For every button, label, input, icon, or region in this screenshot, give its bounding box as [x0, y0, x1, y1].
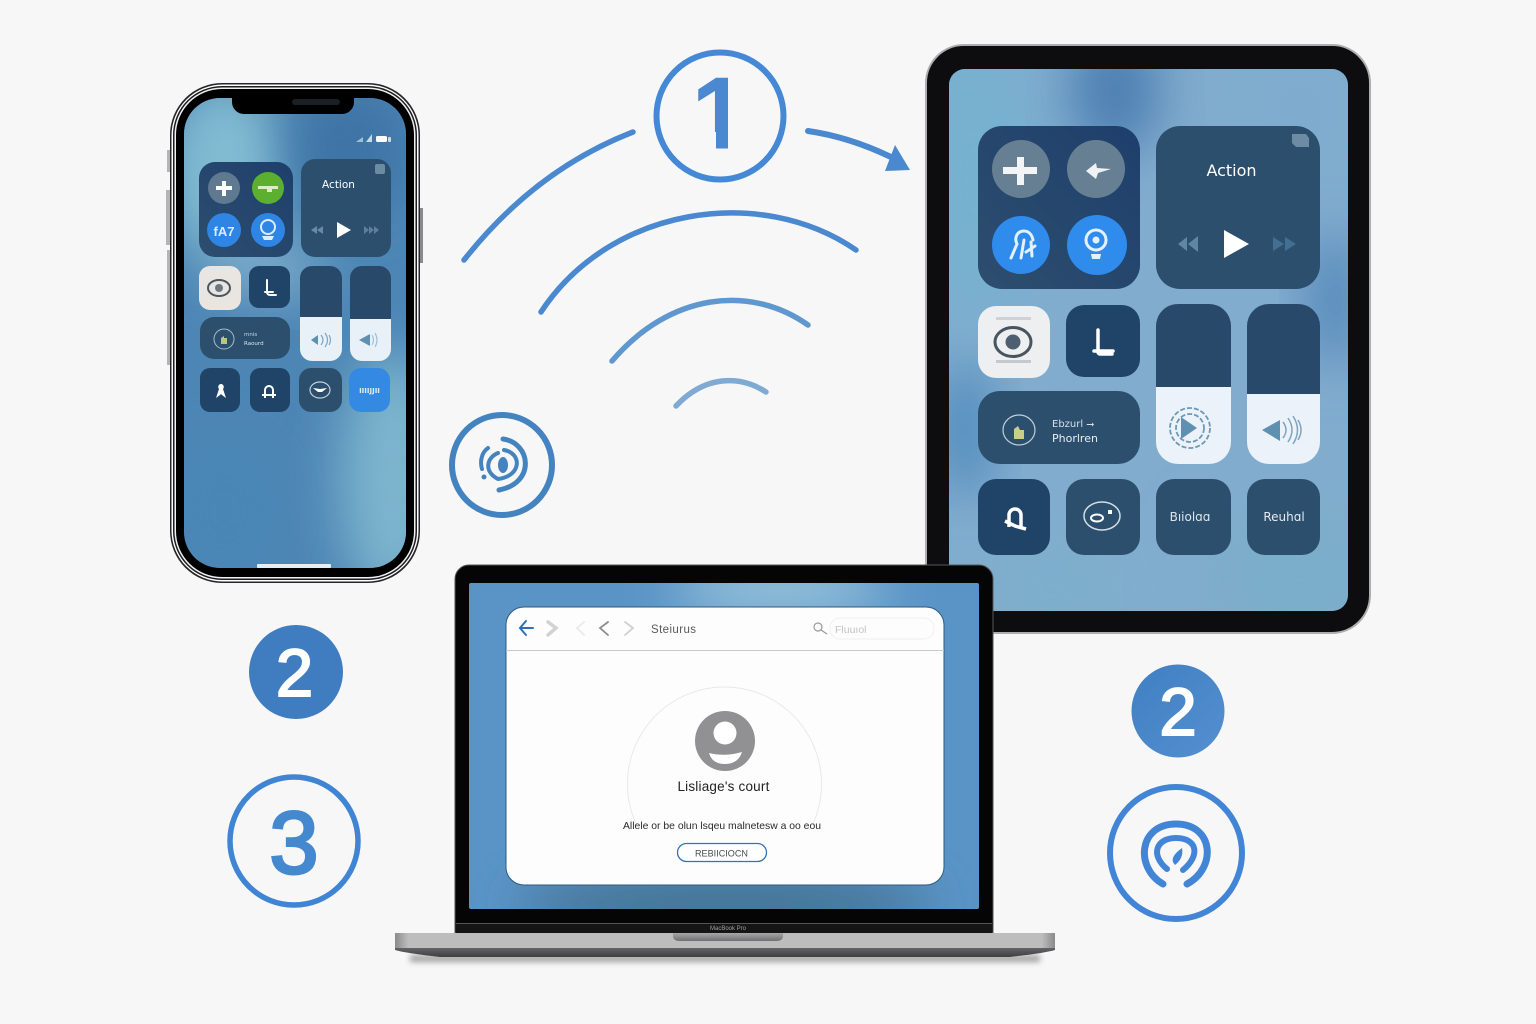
phone media panel: [301, 159, 391, 257]
tablet L tile: [1066, 305, 1140, 377]
browser title: Steiurus: [651, 624, 696, 636]
phone connectivity block: [199, 162, 293, 257]
phone screen: [184, 98, 406, 568]
arrow to tablet: [808, 131, 910, 171]
phone L tile: [249, 266, 290, 308]
profile button: REBIICIOCN: [695, 848, 748, 858]
step 3 badge: [230, 777, 358, 905]
laptop hinge: [456, 923, 992, 933]
phone wide tile: [200, 317, 290, 359]
profile icon: [695, 711, 755, 771]
tablet wide tile: Ebzurl ⭢: [1052, 419, 1094, 430]
phone bottom tiles: IIIIJJII: [359, 387, 380, 395]
tablet bottom tiles: [978, 479, 1320, 555]
profile name: Lisliage's court: [677, 779, 770, 794]
phone wide tile: mnis: [244, 332, 257, 338]
phone notch: [232, 97, 354, 114]
laptop screen: [469, 583, 979, 909]
arc 3: [612, 300, 808, 361]
step 3 badge: 3: [270, 793, 318, 892]
laptop: [395, 565, 1055, 962]
tablet media panel: [1156, 126, 1320, 289]
tablet slider 1: [1156, 304, 1231, 464]
laptop hinge: MacBook Pro: [710, 926, 747, 932]
phone home bar: [257, 564, 331, 568]
browser divider: [506, 650, 944, 651]
laptop lid: [455, 565, 993, 933]
arc 1: [464, 132, 633, 260]
step 2 badge left: [249, 625, 343, 719]
phone bottom tiles: [200, 368, 390, 412]
phone side buttons: [166, 150, 423, 365]
browser search: [814, 618, 934, 639]
tablet bottom tiles: Reuhɑl: [1263, 510, 1305, 524]
step 2 badge right: 2: [1159, 675, 1197, 750]
tablet: [915, 25, 1390, 640]
phone media panel: Action: [322, 179, 355, 191]
step 1 badge: 1: [692, 58, 748, 170]
connection arcs: [464, 132, 856, 406]
phone slider 1: [300, 266, 342, 361]
laptop base: [395, 933, 1055, 957]
tablet wide tile: [978, 391, 1140, 464]
tablet bottom tiles: Bıiolɑɑ: [1170, 510, 1210, 524]
tablet body: [926, 45, 1370, 633]
step 2 badge left: 2: [276, 636, 313, 711]
tablet slider 2: [1247, 304, 1320, 464]
tablet wide tile: Phorlren: [1052, 432, 1098, 445]
phone eye tile: [199, 266, 241, 310]
icon: left signal: [452, 415, 552, 515]
arc 2: [541, 213, 856, 312]
phone connectivity block: fA7: [214, 224, 234, 239]
laptop shadow: [410, 955, 1040, 962]
browser search: Fluuıol: [835, 624, 867, 636]
profile button: [678, 844, 766, 862]
phone status icons: [356, 134, 391, 142]
step 2 badge right: [1132, 664, 1224, 758]
tablet media panel: Action: [1206, 161, 1257, 180]
phone: [166, 83, 423, 583]
phone wide tile: Raourd: [244, 341, 264, 347]
profile arc: [628, 687, 822, 825]
icon: right signal: [1110, 787, 1242, 919]
profile description: Allele or be olun lsqeu malnetesw a oo eou: [623, 820, 821, 832]
step 1 badge: [656, 52, 784, 180]
tablet eye tile: [978, 306, 1050, 378]
phone body: [170, 83, 420, 583]
phone slider 2: [350, 266, 391, 361]
tablet screen: [949, 69, 1348, 611]
arc 4: [676, 381, 766, 406]
browser nav arrows: [520, 621, 633, 635]
tablet connectivity block: [978, 126, 1140, 289]
browser window: [506, 607, 944, 885]
